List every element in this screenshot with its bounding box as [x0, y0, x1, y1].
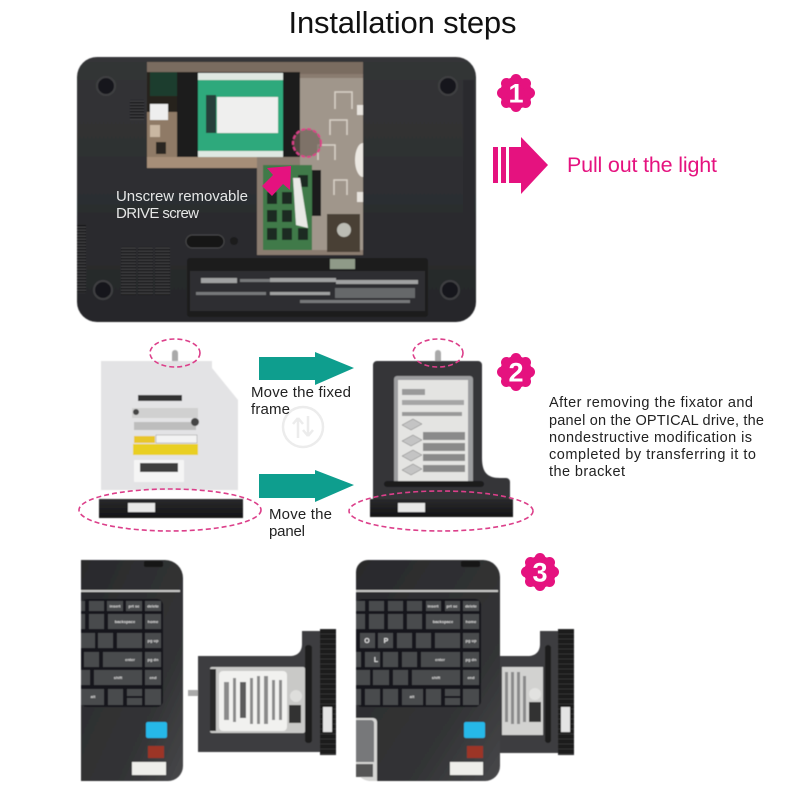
key legends: pg dn: [148, 657, 159, 662]
step 2 description: panel on the OPTICAL drive, the: [549, 413, 764, 429]
key legends: shift: [114, 675, 123, 680]
arrow: move panel: [259, 470, 354, 502]
white sticker: [132, 762, 166, 775]
panel: laptop underside photo: [77, 57, 476, 322]
drive labels: [132, 408, 198, 418]
vents: [77, 100, 170, 295]
key legends: backspace: [115, 619, 136, 624]
photo caption: DRIVE screw: [116, 205, 199, 222]
step 2 description: [549, 395, 764, 480]
keyboard well: [81, 599, 163, 707]
open compartment: [147, 62, 363, 255]
RAM module: [263, 165, 312, 250]
bracket tab: [188, 690, 198, 696]
white sticker: [450, 762, 483, 775]
bracket lever: [305, 645, 312, 743]
key legends: pg dn: [466, 657, 477, 662]
dashed ellipses: [79, 339, 533, 531]
panel: step 3 photo, before inserting: [81, 560, 183, 781]
blue status button: [464, 722, 485, 738]
label: move the fixed frame: Move the fixed: [251, 384, 351, 401]
drive tray: [177, 72, 300, 157]
badge 2: 2: [508, 358, 524, 388]
key legends: alt: [410, 694, 415, 699]
key legends: insert: [428, 604, 439, 608]
key legends: delete: [147, 604, 160, 608]
step 2 description: the bracket: [549, 464, 625, 480]
mounting tab: [172, 350, 178, 361]
laptop: [356, 560, 500, 781]
badge 1: 1: [508, 78, 524, 108]
key legends: enter: [125, 657, 135, 662]
key legends: pg up: [148, 638, 159, 643]
key legends: home: [148, 619, 159, 624]
tray window and label: [394, 376, 473, 486]
badge 1: [497, 74, 535, 112]
keys: [81, 601, 161, 705]
pink pointer arrow: [262, 166, 291, 196]
key legends: P: [384, 638, 389, 645]
label: move the panel: Move the: [269, 506, 332, 523]
panel: step 3 photo, bracket inserted: [356, 560, 574, 781]
watermark: [283, 407, 323, 447]
key legends: insert: [110, 604, 121, 608]
bracket plate: [500, 631, 558, 753]
key legends: shift: [432, 675, 441, 680]
hard drive: [210, 667, 305, 733]
latch: [186, 235, 224, 248]
key legends: alt: [91, 694, 96, 699]
key legends: backspace: [433, 619, 454, 624]
drive bezel panel: [99, 499, 243, 518]
tray lever: [384, 481, 484, 487]
arrow: step 1 pink: [493, 137, 548, 194]
drive barcode: [138, 395, 182, 401]
title: Installation steps: [288, 5, 516, 40]
laptop chassis: [77, 57, 476, 322]
key legends: prt sc: [447, 604, 458, 608]
red sensor: [467, 746, 483, 758]
step 2 description: nondestructive modification is: [549, 430, 752, 446]
bracket lever: [545, 645, 551, 743]
arrow: move fixed frame: [259, 352, 354, 385]
touchpad: [356, 718, 377, 781]
metal shield: [300, 78, 363, 250]
wireless module: [327, 214, 360, 252]
badge 3: 3: [532, 558, 548, 588]
key legends: L: [374, 657, 379, 664]
right edge strip: [463, 80, 474, 236]
red sensor: [148, 746, 164, 758]
photo caption: Unscrew removable: [116, 188, 248, 205]
drive label marks: [505, 672, 526, 724]
dark gap beside RAM: [312, 170, 321, 216]
photo caption: [116, 188, 248, 222]
step 2 description: completed by transferring it to: [549, 447, 756, 463]
step 1 instruction: Pull out the light: [567, 153, 717, 177]
key legends: O: [364, 638, 370, 645]
hard drive: [502, 667, 543, 735]
keyboard well: [356, 599, 481, 707]
rubber feet: [94, 77, 459, 299]
blue status button: [146, 722, 167, 738]
bracket panel: [558, 629, 574, 755]
panel: optical drive photo: [79, 339, 533, 531]
drive body: [101, 361, 238, 490]
label: move the panel: [269, 506, 332, 540]
step 2 description: After removing the fixator and: [549, 395, 753, 411]
bracket plate: [198, 631, 320, 752]
bracket tray: [373, 361, 510, 510]
dashed circle: screw: [293, 129, 321, 157]
key legends: prt sc: [129, 604, 140, 608]
key legends: home: [466, 619, 477, 624]
laptop corner: [81, 560, 183, 781]
key legends: [364, 604, 478, 699]
green adapter card: [198, 73, 283, 157]
tray panel: [370, 499, 513, 517]
key legends: enter: [435, 657, 445, 662]
key legends: delete: [465, 604, 478, 608]
drive label marks: [224, 676, 282, 724]
bay labels: [196, 278, 418, 303]
key legends: pg up: [466, 638, 477, 643]
key legends: end: [467, 675, 475, 680]
shield cut-outs: [318, 92, 352, 195]
key legends: end: [149, 675, 157, 680]
battery bay: [187, 258, 428, 317]
label: move the panel: panel: [269, 523, 305, 540]
label: move the fixed frame: [251, 384, 351, 418]
left connector area: [147, 72, 177, 157]
panel: removed bracket with hard drive: [188, 629, 336, 755]
badge 3: [521, 553, 559, 591]
label: move the fixed frame: frame: [251, 401, 290, 418]
badge 2: [497, 353, 535, 391]
key legends: [91, 604, 160, 699]
keys: [356, 601, 479, 705]
bracket panel: [320, 629, 336, 755]
